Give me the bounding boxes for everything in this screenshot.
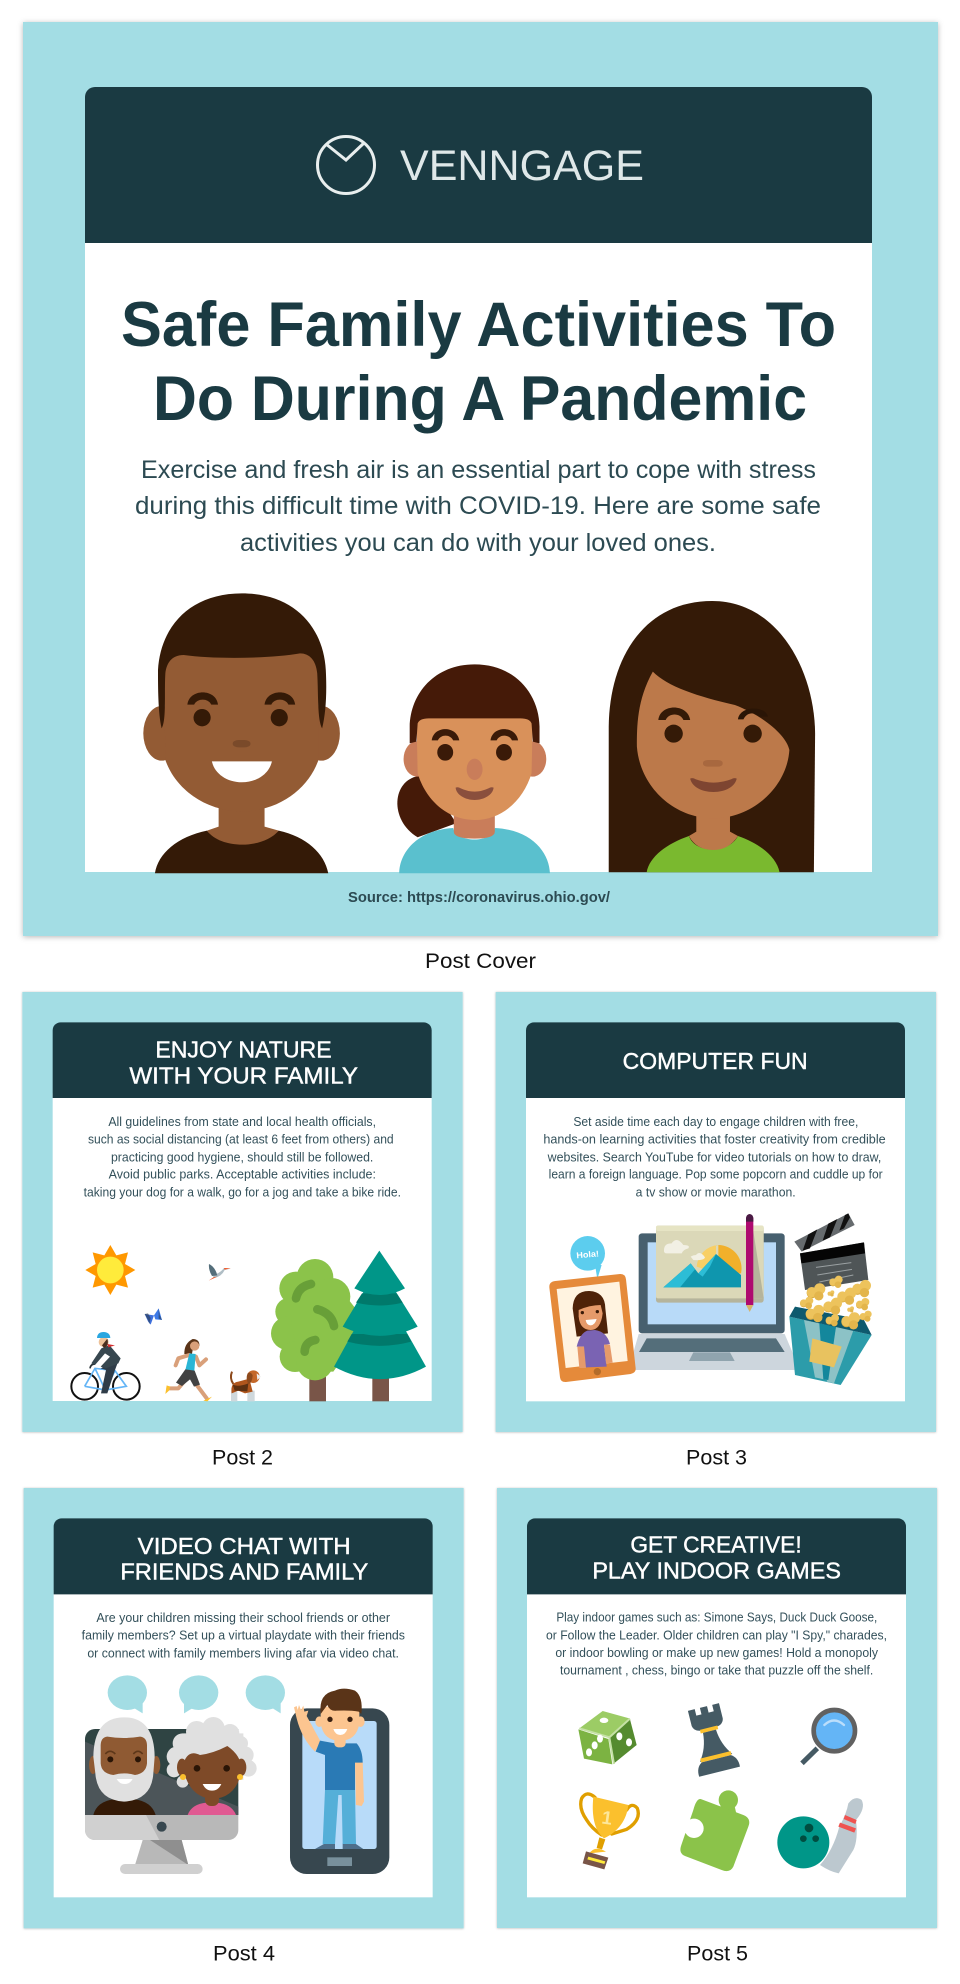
panel: post 4 video chat — [24, 1488, 464, 1928]
man — [143, 593, 340, 873]
panel: post 2 enjoy nature — [22, 992, 463, 1432]
body text: or indoor bowling or make up new games! Hold a monopoly — [555, 1646, 879, 1660]
body text — [543, 1115, 886, 1199]
icon: trophy: 1 — [600, 1807, 614, 1829]
heading — [129, 1037, 358, 1088]
panel: post cover — [23, 22, 938, 936]
heading: VIDEO CHAT WITH — [138, 1533, 351, 1559]
icon: magnifying glass — [802, 1710, 855, 1763]
body text: learn a foreign language. Pop some popcorn and cuddle up for — [549, 1168, 883, 1182]
heading: WITH YOUR FAMILY — [129, 1062, 358, 1088]
body text: such as social distancing (at least 6 feet from others) and — [88, 1133, 394, 1147]
caption: post 5: Post 5 — [687, 1942, 748, 1966]
icon: chess rook — [683, 1702, 740, 1777]
icon: phone with waving boy — [290, 1689, 389, 1874]
header band — [54, 1518, 433, 1594]
heading: COMPUTER FUN — [623, 1048, 808, 1074]
icon: dice — [578, 1711, 637, 1764]
heading: ENJOY NATURE — [155, 1037, 332, 1063]
body text: Play indoor games such as: Simone Says, Duck Duck Goose, — [556, 1611, 877, 1625]
body text: practicing good hygiene, should still be followed. — [111, 1150, 373, 1164]
header band — [53, 1022, 432, 1098]
title: Safe Family Activities To — [121, 290, 836, 360]
title — [121, 290, 836, 434]
caption: post 4: Post 4 — [213, 1942, 275, 1966]
intro text: activities you can do with your loved ones. — [240, 529, 716, 557]
icon: venngage logo — [318, 136, 374, 194]
icon: bowling ball and pin — [777, 1798, 863, 1873]
heading: FRIENDS AND FAMILY — [120, 1559, 368, 1585]
white card — [527, 1590, 906, 1897]
icon: runner — [165, 1339, 212, 1401]
icon: speech bubbles — [108, 1675, 285, 1713]
icon: popcorn box — [789, 1276, 872, 1385]
source line: Source: https://coronavirus.ohio.gov/ — [348, 889, 611, 906]
heading — [592, 1532, 841, 1583]
icon: grandmother — [167, 1717, 257, 1815]
body text: tournament , chess, bingo or take that puzzle off the shelf. — [560, 1664, 873, 1678]
icon: tablet with girl — [549, 1274, 636, 1382]
intro text — [135, 456, 821, 557]
heading: PLAY INDOOR GAMES — [592, 1557, 841, 1583]
icon: pine tree — [334, 1251, 426, 1401]
header band: venngage — [85, 87, 872, 243]
illustration: family portraits — [143, 593, 815, 873]
icon: laptop — [628, 1233, 800, 1370]
body text: Set aside time each day to engage children with free, — [573, 1115, 858, 1129]
body text: Are your children missing their school friends or other — [96, 1611, 390, 1625]
panel: post 5 indoor games — [497, 1488, 937, 1928]
icon: clapperboard — [794, 1213, 868, 1290]
body text: hands-on learning activities that foster creativity from credible — [543, 1133, 886, 1147]
white card: cover — [85, 200, 872, 872]
woman — [609, 601, 815, 872]
icon: sketchbook — [656, 1226, 764, 1303]
icon: leafy tree — [271, 1259, 357, 1401]
logo wordmark: VENNGAGE — [400, 142, 644, 190]
icon: bird — [209, 1264, 231, 1281]
icon: grandfather — [89, 1717, 160, 1815]
body text: All guidelines from state and local health officials, — [108, 1115, 376, 1129]
intro text: during this difficult time with COVID-19. Here are some safe — [135, 492, 821, 520]
header band — [527, 1518, 906, 1594]
white card — [526, 1093, 905, 1401]
white card — [54, 1590, 433, 1897]
icon: speech bubble hola: Hola! — [576, 1248, 599, 1260]
body text: taking your dog for a walk, go for a jog and take a bike ride. — [84, 1185, 401, 1199]
header band — [526, 1022, 905, 1098]
panel: post 3 computer fun — [496, 992, 936, 1432]
icon: dog — [231, 1370, 261, 1401]
icon: pen — [746, 1214, 753, 1312]
body text — [82, 1611, 405, 1660]
title: Do During A Pandemic — [153, 364, 807, 434]
heading — [120, 1533, 368, 1585]
body text: websites. Search YouTube for video tutorials on how to draw, — [547, 1150, 881, 1164]
white card — [53, 1093, 432, 1401]
caption: post 2: Post 2 — [212, 1446, 273, 1470]
heading: GET CREATIVE! — [630, 1532, 802, 1558]
icon: puzzle piece — [680, 1790, 749, 1871]
body text — [546, 1611, 887, 1678]
icon: trophy — [581, 1794, 638, 1869]
body text: a tv show or movie marathon. — [636, 1185, 796, 1199]
body text: or Follow the Leader. Older children can play "I Spy," charades, — [546, 1628, 887, 1642]
body text: Avoid public parks. Acceptable activities include: — [109, 1168, 376, 1182]
icon: speech bubble hola — [570, 1236, 605, 1279]
body text — [84, 1115, 401, 1199]
caption: post 3: Post 3 — [686, 1446, 747, 1470]
body text: or connect with family members living afar via video chat. — [87, 1646, 399, 1660]
intro text: Exercise and fresh air is an essential part to cope with stress — [141, 456, 816, 484]
body text: family members? Set up a virtual playdate with their friends — [82, 1629, 405, 1643]
icon: butterfly — [145, 1308, 162, 1325]
caption: post cover: Post Cover — [425, 950, 536, 973]
icon: sun — [85, 1245, 135, 1295]
girl — [397, 664, 550, 873]
icon: cyclist — [71, 1332, 140, 1400]
icon: desktop monitor — [85, 1729, 238, 1874]
